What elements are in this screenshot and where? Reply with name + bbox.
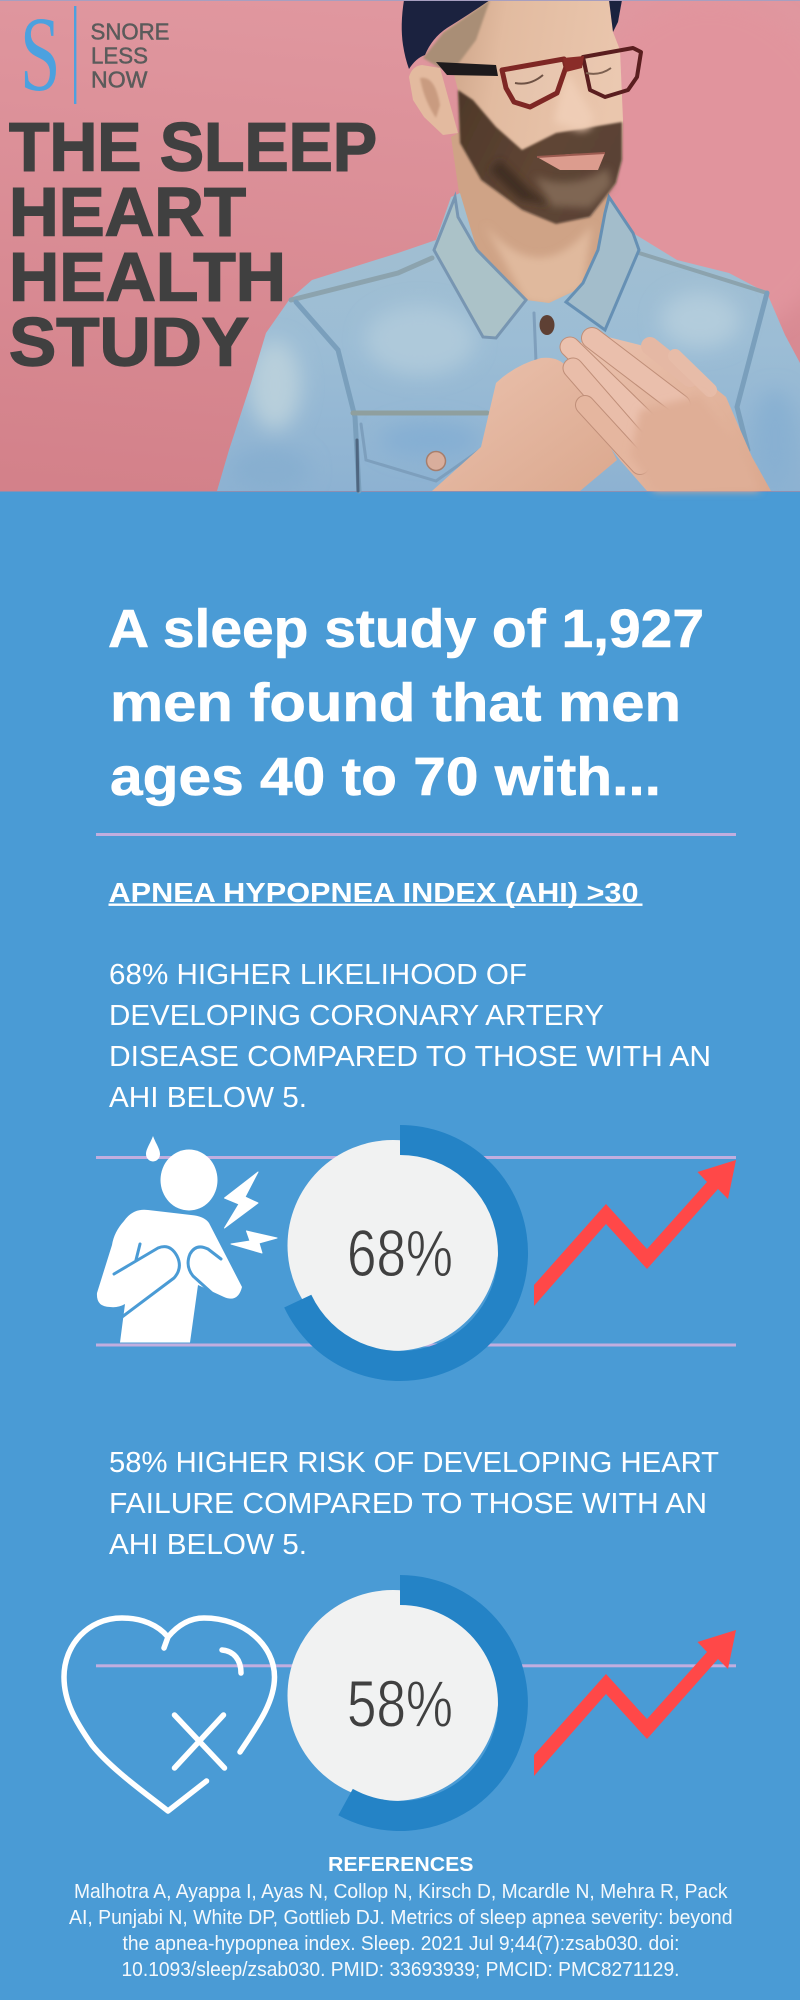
citation: the apnea-hypopnea index. Sleep. 2021 Jul 9;44(7):zsab030. doi: bbox=[122, 1932, 680, 1955]
logo wordmark: SNORE bbox=[90, 18, 170, 44]
arrow: rising trend 2 bbox=[534, 1630, 736, 1776]
left hand bbox=[432, 358, 617, 491]
glasses temple bbox=[436, 62, 498, 76]
logo wordmark: LESS bbox=[91, 42, 148, 68]
value 68%: 68% bbox=[347, 1216, 453, 1290]
pain bolt upper bbox=[224, 1172, 258, 1228]
under fingers bbox=[650, 346, 690, 378]
pocket button bbox=[426, 452, 446, 470]
text block: coronary artery disease: DISEASE COMPARED TO THOSE WITH AN bbox=[109, 1041, 711, 1073]
arm outlines bbox=[114, 1244, 224, 1317]
right hand bbox=[570, 335, 771, 491]
citation: Malhotra A, Ayappa I, Ayas N, Collop N, Kirsch D, Mcardle N, Mehra R, Pack bbox=[74, 1880, 728, 1903]
citation bbox=[69, 1880, 732, 1981]
chart: 58% donut bbox=[288, 1575, 528, 1831]
logo wordmark: NOW bbox=[91, 66, 148, 92]
top fingers bbox=[592, 338, 680, 405]
head bbox=[160, 1150, 218, 1210]
side hair bbox=[423, 0, 490, 68]
photo: man with hands on chest bbox=[217, 0, 800, 492]
ear bbox=[409, 65, 458, 135]
title: HEART bbox=[9, 174, 246, 250]
sweat drop bbox=[146, 1136, 160, 1162]
pink photo backdrop bbox=[0, 1, 800, 492]
text block: coronary artery disease: AHI BELOW 5. bbox=[109, 1082, 307, 1114]
subheading: AHI: APNEA HYPOPNEA INDEX (AHI) >30 bbox=[108, 877, 638, 908]
text block: coronary artery disease: DEVELOPING CORONARY ARTERY bbox=[109, 1000, 604, 1032]
neck bbox=[451, 120, 622, 306]
chart: 68% donut bbox=[284, 1125, 528, 1381]
title: STUDY bbox=[9, 304, 249, 380]
jacket body bbox=[217, 193, 800, 491]
arrow: rising trend 1 bbox=[534, 1160, 736, 1306]
heading: study summary: A sleep study of 1,927 bbox=[108, 599, 704, 659]
text block: coronary artery disease: 68% HIGHER LIKELIHOOD OF bbox=[109, 959, 527, 991]
donut ring 68% bbox=[284, 1125, 528, 1381]
heading: study summary: ages 40 to 70 with... bbox=[110, 747, 661, 807]
left lens bbox=[502, 59, 566, 107]
logo bbox=[20, 0, 170, 113]
heading: study summary bbox=[108, 599, 704, 807]
closed eyes bbox=[515, 75, 543, 84]
jacket seams bbox=[291, 253, 767, 491]
icon: person with chest pain bbox=[97, 1136, 277, 1342]
references heading: REFERENCES bbox=[328, 1853, 474, 1876]
text block: heart failure: FAILURE COMPARED TO THOSE WITH AN bbox=[109, 1488, 707, 1520]
nose bbox=[554, 72, 594, 131]
glasses bbox=[436, 48, 641, 107]
donut centre bbox=[288, 1590, 498, 1801]
heading: study summary: men found that men bbox=[110, 673, 681, 733]
hand shading blend bbox=[630, 395, 760, 491]
back of hand bbox=[575, 335, 771, 491]
torso and arms bbox=[97, 1210, 242, 1342]
citation: 10.1093/sleep/zsab030. PMID: 33693939; PMCID: PMC8271129. bbox=[122, 1958, 680, 1981]
text block: heart failure: AHI BELOW 5. bbox=[109, 1529, 307, 1561]
denim light patches bbox=[245, 290, 791, 470]
text block: heart failure bbox=[109, 1447, 719, 1561]
donut ring 58% bbox=[338, 1575, 528, 1831]
head and face bbox=[443, 0, 623, 223]
text block: coronary artery disease bbox=[109, 959, 711, 1114]
icon: broken heart bbox=[64, 1618, 274, 1811]
panel: hero photo bbox=[0, 0, 800, 492]
logo divider bbox=[74, 6, 76, 104]
pain bolt lower bbox=[231, 1231, 277, 1253]
right lens bbox=[583, 48, 641, 97]
title: THE SLEEP bbox=[9, 108, 377, 186]
donut centre bbox=[288, 1140, 498, 1351]
jacket collar bbox=[434, 197, 526, 338]
title bbox=[9, 108, 377, 380]
knit hat bbox=[402, 0, 490, 69]
thin top strip bbox=[0, 0, 800, 1]
value 58%: 58% bbox=[347, 1666, 453, 1740]
beard bbox=[458, 90, 622, 224]
logo wordmark bbox=[90, 18, 170, 92]
text block: heart failure: 58% HIGHER RISK OF DEVELOPING HEART bbox=[109, 1447, 719, 1479]
jacket button bbox=[540, 315, 554, 335]
references bbox=[69, 1853, 732, 1981]
citation: AI, Punjabi N, White DP, Gottlieb DJ. Metrics of sleep apnea severity: beyond bbox=[69, 1906, 732, 1929]
bridge bbox=[563, 56, 584, 72]
lips bbox=[537, 153, 605, 170]
title: HEALTH bbox=[9, 238, 286, 316]
